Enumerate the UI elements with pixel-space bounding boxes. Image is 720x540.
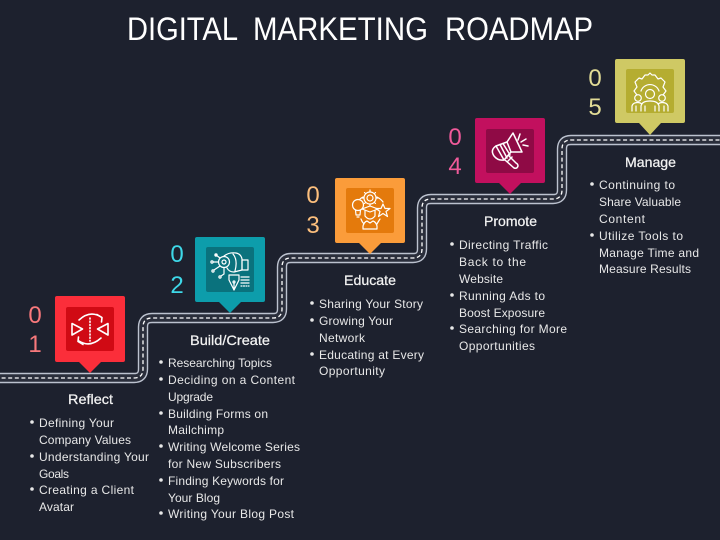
list: Manage items: Content	[599, 212, 646, 226]
icon: reflect arrows and mirrored triangles	[72, 314, 108, 344]
marker card 5	[615, 59, 685, 135]
list: Promote items: Searching for More	[459, 322, 567, 336]
heading: Educate: Educate	[344, 272, 396, 288]
list: Promote items: Website	[459, 272, 503, 286]
list: Educate items: Educating at Every	[319, 348, 424, 362]
list: Manage items: Continuing to	[599, 178, 675, 192]
road path	[0, 140, 720, 378]
heading: Promote: Promote	[484, 213, 537, 229]
title: DIGITAL	[127, 11, 238, 47]
list: Educate items: Growing Your	[319, 314, 393, 328]
list: Promote items: Back to the	[459, 255, 526, 269]
number 02: 0	[170, 241, 184, 268]
list: Build/Create items: Researching Topics	[168, 356, 272, 370]
number 01: 1	[28, 331, 42, 358]
marker card 2	[195, 237, 265, 313]
list: Build/Create items: Finding Keywords for	[168, 474, 284, 488]
list: Build/Create items: Mailchimp	[168, 423, 224, 437]
list: Reflect items: Avatar	[39, 500, 74, 514]
number 01: 0	[28, 302, 42, 329]
title: ROADMAP	[445, 11, 593, 47]
step 4: Promote	[448, 118, 567, 353]
list: Reflect items: Defining Your	[39, 416, 114, 430]
number 02	[170, 241, 184, 299]
icon: graduate with gear, bulb and star	[352, 190, 390, 229]
icon: team and gear	[632, 73, 668, 111]
inner panel 5	[626, 69, 674, 113]
number 03: 3	[306, 212, 320, 239]
list: Build/Create items	[159, 356, 300, 521]
number 01	[28, 302, 42, 358]
list: Promote items: Directing Traffic	[459, 238, 548, 252]
inner panel 2	[206, 247, 254, 292]
step 2: Build/Create	[159, 237, 300, 521]
list: Promote items	[450, 238, 567, 353]
number 04: 4	[448, 153, 462, 180]
list: Build/Create items: for New Subscribers	[168, 457, 281, 471]
number 02: 2	[170, 272, 184, 299]
list: Build/Create items: Your Blog	[168, 491, 220, 505]
list: Promote items: Opportunities	[459, 339, 535, 353]
heading: Manage: Manage	[625, 154, 676, 170]
inner panel 4	[486, 129, 534, 173]
list: Manage items: Share Valuable	[599, 195, 681, 209]
number 03: 0	[306, 182, 320, 209]
inner panel 1	[66, 307, 114, 351]
number 05: 5	[588, 94, 602, 121]
list: Reflect items	[30, 416, 149, 514]
number 05	[588, 65, 602, 121]
list: Promote items: Boost Exposure	[459, 306, 545, 320]
list: Manage items	[590, 178, 699, 276]
list: Reflect items: Goals	[39, 467, 69, 481]
inner panel 3	[346, 188, 394, 233]
list: Build/Create items: Writing Welcome Series	[168, 440, 300, 454]
number 04	[448, 124, 462, 180]
list: Manage items: Measure Results	[599, 262, 691, 276]
list: Promote items: Running Ads to	[459, 289, 545, 303]
step 3: Educate	[306, 178, 424, 378]
list: Build/Create items: Upgrade	[168, 390, 213, 404]
number 04: 0	[448, 124, 462, 151]
number 03	[306, 182, 320, 239]
heading: Build/Create: Build/Create	[190, 332, 270, 348]
list: Build/Create items: Building Forms on	[168, 407, 268, 421]
marker card 3	[335, 178, 405, 254]
marker card 1	[55, 296, 125, 373]
list: Build/Create items: Deciding on a Content	[168, 373, 296, 387]
list: Reflect items: Understanding Your	[39, 450, 149, 464]
step 1: Reflect	[28, 296, 149, 514]
list: Manage items: Utilize Tools to	[599, 229, 683, 243]
heading: Reflect: Reflect	[68, 391, 113, 407]
step 5: Manage	[588, 59, 699, 276]
title	[127, 11, 593, 47]
icon: megaphone	[492, 133, 528, 168]
icon: robot hand with pen nib	[211, 253, 249, 290]
list: Build/Create items: Writing Your Blog Post	[168, 507, 295, 521]
list: Reflect items: Creating a Client	[39, 483, 135, 497]
number 05: 0	[588, 65, 602, 92]
list: Educate items: Network	[319, 331, 366, 345]
list: Reflect items: Company Values	[39, 433, 131, 447]
title: MARKETING	[253, 11, 428, 47]
list: Manage items: Manage Time and	[599, 246, 699, 260]
list: Educate items	[310, 297, 424, 378]
list: Educate items: Sharing Your Story	[319, 297, 423, 311]
marker card 4	[475, 118, 545, 194]
list: Educate items: Opportunity	[319, 364, 385, 378]
